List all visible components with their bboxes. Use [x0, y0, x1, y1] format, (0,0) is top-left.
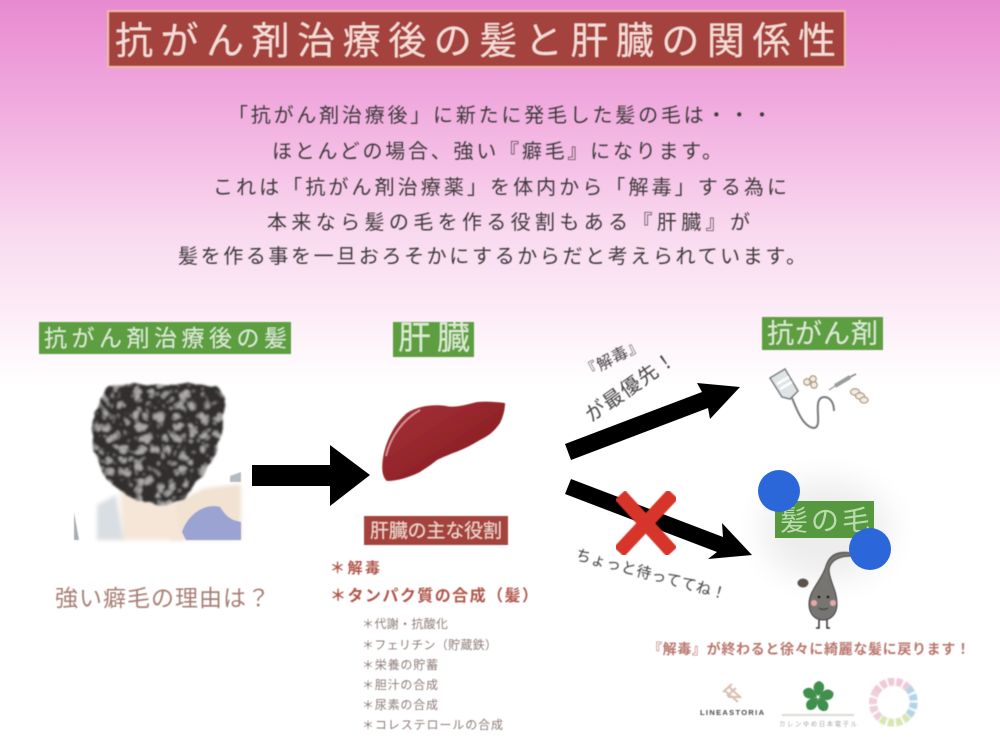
photo: curly hair seen from behind: [74, 384, 241, 540]
main roles list: ＊タンパク質の合成（髪）: [330, 586, 538, 605]
caption: detox first: が最優先！: [581, 348, 680, 427]
intro paragraph: 「抗がん剤治療後」に新たに発毛した髪の毛は・・・: [228, 104, 772, 127]
soft shadow behind markers: [761, 480, 891, 580]
icon: hair follicle character: [798, 552, 851, 628]
intro paragraph: [178, 104, 806, 268]
logo: green flower: [779, 681, 858, 728]
logo: colorful wreath: [873, 682, 914, 723]
logo: green flower: カレンゆめ日本電子ル: [779, 719, 858, 728]
arrow: to hair: [565, 479, 752, 559]
main roles list: ＊解毒: [330, 559, 380, 577]
heading: anticancer drug: 抗がん剤: [767, 319, 878, 349]
caption: hair recovers: 『解毒』が終わると徐々に綺麗な髪に戻ります！: [648, 641, 970, 657]
intro paragraph: 本来なら髪の毛を作る役割もある『肝臓』が: [267, 211, 750, 234]
other roles list: ＊栄養の貯蓄: [362, 657, 438, 672]
title banner: 抗がん剤治療後の髪と肝臓の関係性: [115, 21, 836, 63]
intro paragraph: 髪を作る事を一旦おろそかにするからだと考えられています。: [178, 245, 806, 268]
arrow: to anticancer drug: [565, 383, 740, 460]
main roles list: [330, 559, 538, 605]
caption: please wait: ちょっと待っててね！: [574, 546, 728, 603]
heading: hair: 髪の毛: [780, 505, 870, 536]
other roles list: ＊代謝・抗酸化: [362, 617, 448, 631]
background gradient: [0, 0, 1000, 385]
icon: red cross: [619, 494, 673, 552]
marker: blue dot upper: [758, 470, 800, 512]
question: reason for curly hair: 強い癖毛の理由は？: [55, 585, 270, 611]
heading: main roles of liver: [364, 516, 508, 545]
other roles list: [362, 617, 503, 732]
other roles list: ＊コレステロールの合成: [362, 718, 503, 732]
heading: liver: 肝臓: [398, 319, 470, 356]
other roles list: ＊尿素の合成: [362, 698, 438, 712]
arrow: hair to liver: [252, 445, 370, 506]
other roles list: ＊フェリチン（貯蔵鉄）: [362, 637, 497, 652]
icon: IV drip and pills: [770, 369, 868, 428]
logo: Lineastoria: [700, 684, 765, 717]
logo: Lineastoria: LINEASTORIA: [700, 708, 765, 717]
heading: hair after chemo: 抗がん剤治療後の髪: [44, 325, 287, 351]
intro paragraph: ほとんどの場合、強い『癖毛』になります。: [272, 140, 722, 163]
intro paragraph: これは「抗がん剤治療薬」を体内から「解毒」する為に: [213, 176, 787, 199]
caption: detox first: 『解毒』: [579, 335, 646, 382]
icon: liver: [382, 402, 505, 481]
marker: blue dot lower: [849, 528, 891, 570]
heading: main roles of liver: 肝臓の主な役割: [370, 520, 502, 542]
other roles list: ＊胆汁の合成: [362, 678, 438, 692]
